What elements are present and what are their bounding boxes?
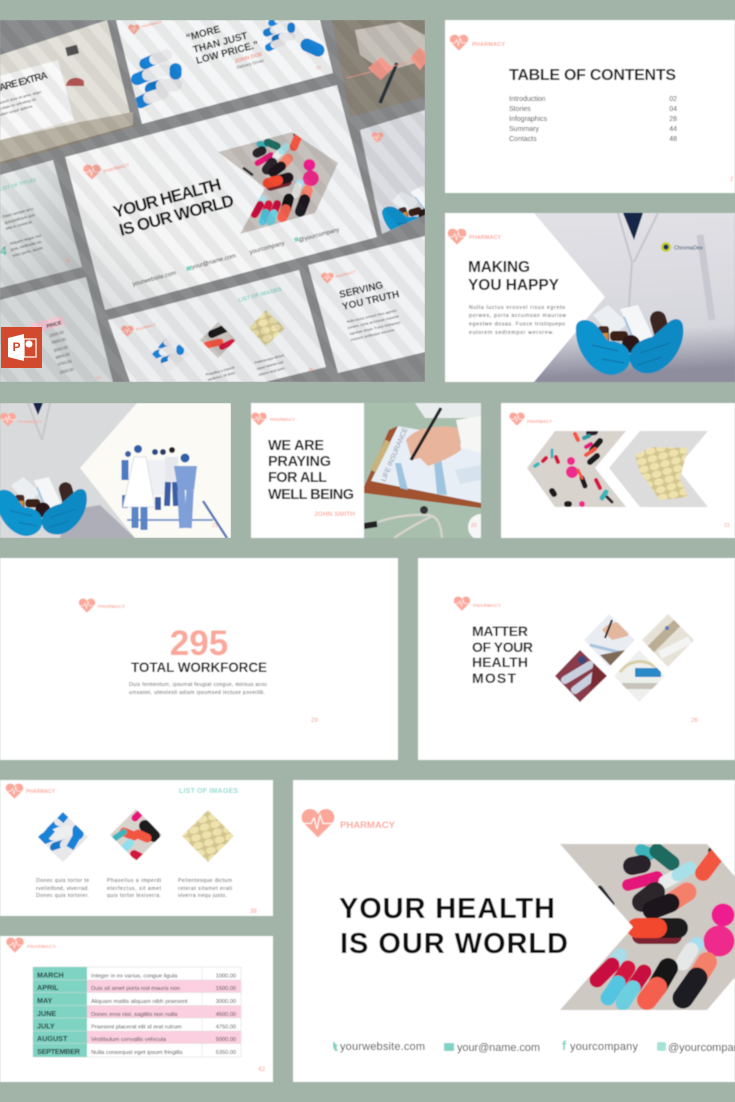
table: JULY bbox=[37, 1022, 55, 1030]
slide: more than just low price quote: PHARMACY bbox=[141, 20, 163, 29]
panel: hero slide your health is our world: IS OUR WORLD bbox=[340, 928, 568, 960]
slide: list of titles: quisquidictum quis bbox=[4, 213, 36, 225]
table: Aliquam mattis aliquam nibh praesent bbox=[91, 999, 188, 1005]
contact row: f bbox=[562, 1038, 567, 1053]
slide: list of images small: eleifectus, sit amet bbox=[207, 371, 235, 382]
panel: 295 total workforce: TOTAL WORKFORCE bbox=[131, 660, 267, 675]
slide: price table: 41 bbox=[96, 375, 102, 380]
gloved hands bbox=[576, 305, 683, 375]
panel: matter of your health most: HEALTH bbox=[472, 654, 528, 670]
diamond photos bbox=[584, 614, 636, 667]
diamond: mixed capsules bbox=[110, 809, 162, 861]
slide: list of images small: Pellentesque dictum bbox=[254, 353, 285, 365]
contents list: 04 bbox=[669, 106, 677, 113]
slide: price table: 2200.00 bbox=[49, 329, 65, 338]
table: JUNE bbox=[37, 1009, 56, 1018]
arrow of capsules bbox=[555, 840, 735, 1015]
table: 4750.00 bbox=[216, 1024, 236, 1030]
clipboard photo bbox=[364, 403, 494, 540]
panel: hero slide your health is our world bbox=[293, 780, 735, 1082]
slide: your health is our world small: PHARMACY bbox=[103, 162, 130, 174]
panel: making you happy: YOU HAPPY bbox=[468, 277, 560, 294]
slide: gloved hands right bbox=[360, 110, 425, 234]
panel: two chevrons of pills: 23 bbox=[724, 523, 730, 529]
slide: list of images small bbox=[108, 270, 326, 382]
slide: list of images small: LIST OF IMAGES bbox=[238, 287, 283, 304]
slide: price table: 4750.00 bbox=[57, 358, 73, 367]
panel: matter of your health most: MATTER bbox=[472, 623, 528, 639]
slide: serving you truth: YOU TRUTH bbox=[341, 289, 401, 313]
contents list: Infographics bbox=[509, 116, 548, 123]
panel: matter of your health most: MOST bbox=[472, 670, 516, 686]
contents list: 02 bbox=[669, 96, 677, 103]
panel: 295 total workforce bbox=[0, 558, 398, 760]
panel: list of images: eterfectus, sit amet bbox=[107, 886, 162, 892]
table: APRIL bbox=[37, 983, 59, 992]
panel: making you happy: egestwe dosas. Fusce tristiquepo bbox=[469, 322, 565, 328]
panel: making you happy bbox=[445, 213, 735, 382]
slide: list of titles: elite in consecte bbox=[5, 220, 33, 231]
table bbox=[33, 967, 241, 1057]
table: 1500.00 bbox=[216, 986, 236, 992]
panel: list of images: Donec quis tortor te bbox=[36, 878, 89, 884]
panel: 295 total workforce: 29 bbox=[311, 718, 318, 724]
panel: making you happy: Nulla luctus eroovel risus egreto bbox=[469, 305, 565, 311]
panel: list of images: quis tortor lexiverra. bbox=[107, 893, 161, 899]
panel: coat and hospital hallway: PHARMACY bbox=[18, 419, 42, 424]
slide: list of titles bbox=[0, 160, 82, 288]
table: Nulla consequat eget ipsum fringilla bbox=[91, 1050, 183, 1056]
slide: more than just low price quote bbox=[116, 17, 333, 124]
panel: 295 total workforce: umsanni, utmolesti adiam ipsumsed lectuse poverlib. bbox=[129, 690, 265, 696]
slide: list of images small: rateat sitamet erat bbox=[256, 360, 284, 371]
slide: list of titles: pota, eleifendid uis bbox=[10, 240, 42, 252]
logo on coat: ChromaDex bbox=[674, 246, 703, 252]
panel: making you happy: PHARMACY bbox=[469, 235, 501, 241]
panel: table of contents bbox=[445, 20, 735, 193]
panel: matter of your health most bbox=[418, 558, 735, 760]
slide: price table: 5600.00 bbox=[51, 336, 67, 345]
slide: price table: 2500.00 bbox=[59, 366, 75, 375]
right chevron yellow pills bbox=[609, 431, 708, 507]
panel: list of images: Donec quis tortorer. bbox=[36, 893, 89, 899]
panel: matter of your health most: OF YOUR bbox=[472, 639, 533, 655]
slide: more than just low price quote: THAN JUST bbox=[192, 31, 249, 56]
slide: price table: 2000.00 bbox=[53, 344, 69, 353]
contents list: 48 bbox=[669, 136, 677, 143]
panel: list of images: Pellentesque dictum bbox=[178, 878, 232, 884]
table: Integer in ex varius, congue ligula bbox=[91, 974, 178, 980]
light and shadow stripes bbox=[0, 20, 425, 382]
slide: serving you truth bbox=[308, 236, 425, 373]
panel: we are praying bbox=[251, 403, 494, 540]
slide: lab coat photo, are extra: collatis tor urticating elit bbox=[0, 97, 36, 111]
slide: list of titles: 36 bbox=[65, 258, 71, 263]
panel: coat and hospital hallway: 21 bbox=[212, 523, 218, 529]
slide: serving you truth: eutorem sedtempor werorew. bbox=[350, 328, 395, 342]
table: 1000.00 bbox=[216, 974, 236, 980]
panel: table of contents: 2 bbox=[730, 177, 734, 183]
slide: your health is our world small: yourcompany bbox=[249, 241, 285, 256]
slide: your health is our world small: YOUR HEALTH bbox=[111, 175, 223, 222]
contact row bbox=[333, 1038, 735, 1054]
table: Vestibulum convallis vehicula bbox=[91, 1037, 167, 1043]
panel: list of images bbox=[0, 780, 273, 916]
panel: month price table bbox=[0, 936, 273, 1082]
slide: more than just low price quote: Delivery Driver bbox=[236, 58, 265, 70]
panel: matter of your health most: 26 bbox=[691, 718, 698, 724]
panel: we are praying: 20 bbox=[471, 523, 477, 529]
slide: serving you truth: egestwe dosas. Fusce tristiquepo bbox=[349, 320, 401, 336]
panel: month price table: PHARMACY bbox=[27, 944, 57, 950]
panel: we are praying: PHARMACY bbox=[270, 417, 295, 422]
table: Donec eros nisl, sagittis non nulla bbox=[91, 1012, 178, 1018]
panel: 295 total workforce: PHARMACY bbox=[98, 604, 125, 609]
panel: two chevrons of pills: PHARMACY bbox=[527, 419, 552, 424]
panel: coat and hospital hallway bbox=[0, 403, 231, 538]
slide: list of images small: PHARMACY bbox=[135, 323, 157, 332]
icon: powerpoint: P bbox=[12, 340, 21, 354]
contents list: Stories bbox=[509, 106, 531, 113]
logo: PHARMACY bbox=[472, 42, 505, 48]
diamond: yellow pills bbox=[182, 810, 234, 862]
contents list: Contacts bbox=[509, 136, 537, 143]
stat number: 295 bbox=[170, 624, 228, 663]
contents list: Introduction bbox=[509, 96, 546, 103]
table: MARCH bbox=[37, 970, 64, 980]
slide: lab coat photo, are extra bbox=[0, 20, 138, 165]
table: Praesent placerat elit id erat rutrum bbox=[91, 1024, 182, 1030]
logo bbox=[302, 809, 396, 838]
logo bbox=[450, 35, 505, 51]
logo: PHARMACY bbox=[340, 820, 396, 831]
table: 5000.00 bbox=[216, 1037, 236, 1043]
panel: list of images: LIST OF IMAGES bbox=[179, 788, 238, 795]
table: 4500.00 bbox=[216, 1012, 236, 1018]
slide: list of images small: viverra neqs justo. bbox=[258, 366, 286, 377]
slide: list of titles: enim portis, iaculis bbox=[12, 246, 44, 258]
slide: price table: 6800.00 bbox=[55, 351, 71, 360]
clipboard photo: LIFE INSURANCE bbox=[380, 426, 410, 483]
panel: we are praying: WELL BEING bbox=[268, 487, 354, 503]
table: AUGUST bbox=[37, 1034, 68, 1043]
panel: making you happy: eutorem sedtempor werorew. bbox=[469, 330, 554, 336]
table: SEPTEMBER bbox=[37, 1047, 81, 1056]
panel: two chevrons of pills bbox=[501, 403, 735, 538]
slide: price table: PRICE bbox=[46, 320, 63, 330]
contents list: Summary bbox=[509, 126, 539, 133]
contents list bbox=[509, 96, 677, 143]
logo on coat bbox=[661, 242, 703, 252]
mini arrow of pills bbox=[218, 129, 345, 234]
slide: list of titles: LIST OF TITLES bbox=[0, 177, 38, 193]
table: 5350.00 bbox=[216, 1050, 236, 1056]
slide: more than just low price quote: 22 bbox=[316, 65, 322, 70]
panel: we are praying: WE ARE bbox=[268, 438, 324, 454]
panel: perspective mockup of slides bbox=[0, 20, 425, 382]
contact row: yourcompany bbox=[570, 1041, 638, 1053]
slide: serving you truth: PHARMACY bbox=[335, 270, 357, 279]
slide: list of titles: Etiam semper arcu bbox=[2, 207, 34, 219]
diamond: blue capsules bbox=[38, 812, 88, 862]
table: MAY bbox=[37, 996, 53, 1005]
slide: list of titles: 4 bbox=[0, 244, 7, 258]
slide: list of titles: Aliquam neque mol bbox=[9, 234, 42, 246]
slide: list of images small: 38 bbox=[308, 367, 314, 372]
table: Duis sit amet porta nisl mauris non bbox=[91, 986, 180, 992]
slide: list of images small: Phasellus a imperdi bbox=[205, 365, 235, 377]
panel: list of images: 38 bbox=[250, 909, 257, 915]
slide: your health is our world small: your@name.com bbox=[191, 253, 237, 271]
panel: making you happy: MAKING bbox=[468, 259, 530, 276]
slide: your health is our world small: IS OUR WORLD bbox=[117, 191, 236, 240]
slide: your health is our world small: @yourcompany bbox=[298, 227, 340, 244]
panel: list of images: Phasellus a imperdi bbox=[107, 878, 161, 884]
slide: more than just low price quote: LOW PRICE.” bbox=[195, 40, 260, 67]
panel: making you happy: porwes, porta accumsan maurisw bbox=[469, 313, 566, 319]
slide: lab coat photo, are extra: ullam vulque aptitene bbox=[0, 104, 33, 117]
contents list: 44 bbox=[669, 126, 677, 133]
headline: YOUR HEALTH bbox=[339, 893, 555, 925]
white arrow bbox=[445, 213, 605, 382]
slide: more than just low price quote: JOHN DOE bbox=[234, 52, 264, 65]
panel: month price table: 42 bbox=[258, 1066, 266, 1073]
panel: 295 total workforce: Duis fermentum, ipsumat feugiat congue, mirisus acoc bbox=[129, 682, 268, 688]
contact row: your@name.com bbox=[457, 1042, 540, 1054]
left chevron mixed pills bbox=[525, 431, 627, 507]
slide: serving you truth: porwes, porta accumsan mauriow bbox=[347, 314, 400, 330]
panel: we are praying: FOR ALL bbox=[268, 470, 327, 486]
slide: lab coat photo, are extra: ipsum dolor sit amet, aliqet bbox=[0, 90, 42, 105]
heading: TABLE OF CONTENTS bbox=[509, 67, 676, 84]
slide: serving you truth: SERVING bbox=[338, 280, 385, 301]
panel: list of images: reterat sitamet erati bbox=[178, 886, 232, 892]
panel: list of images: PHARMACY bbox=[26, 789, 56, 795]
slide: more than just low price quote: “MORE bbox=[185, 24, 222, 44]
panel: matter of your health most: PHARMACY bbox=[473, 603, 501, 608]
hallway walkers bbox=[123, 445, 227, 538]
table: 3000.00 bbox=[216, 999, 236, 1005]
contents list: 28 bbox=[669, 116, 677, 123]
icon: powerpoint bbox=[1, 327, 42, 368]
panel: list of images: viverra nequ justo. bbox=[178, 893, 227, 899]
slide: price table bbox=[0, 277, 113, 382]
contact row: yourwebsite.com bbox=[340, 1041, 425, 1053]
panel: list of images: rvelleifond, viverrad. bbox=[36, 886, 89, 892]
slide: your health is our world small bbox=[65, 85, 377, 310]
slide: serving you truth: Nulla luctus eniovel risus agresto bbox=[346, 309, 397, 324]
panel: we are praying: PRAYING bbox=[268, 454, 331, 470]
slide: your health is our world small: yourwebsite.com bbox=[132, 270, 177, 288]
slide: dark photo with pink diamonds bbox=[332, 20, 430, 117]
panel: we are praying: JOHN SMITH bbox=[314, 511, 355, 518]
